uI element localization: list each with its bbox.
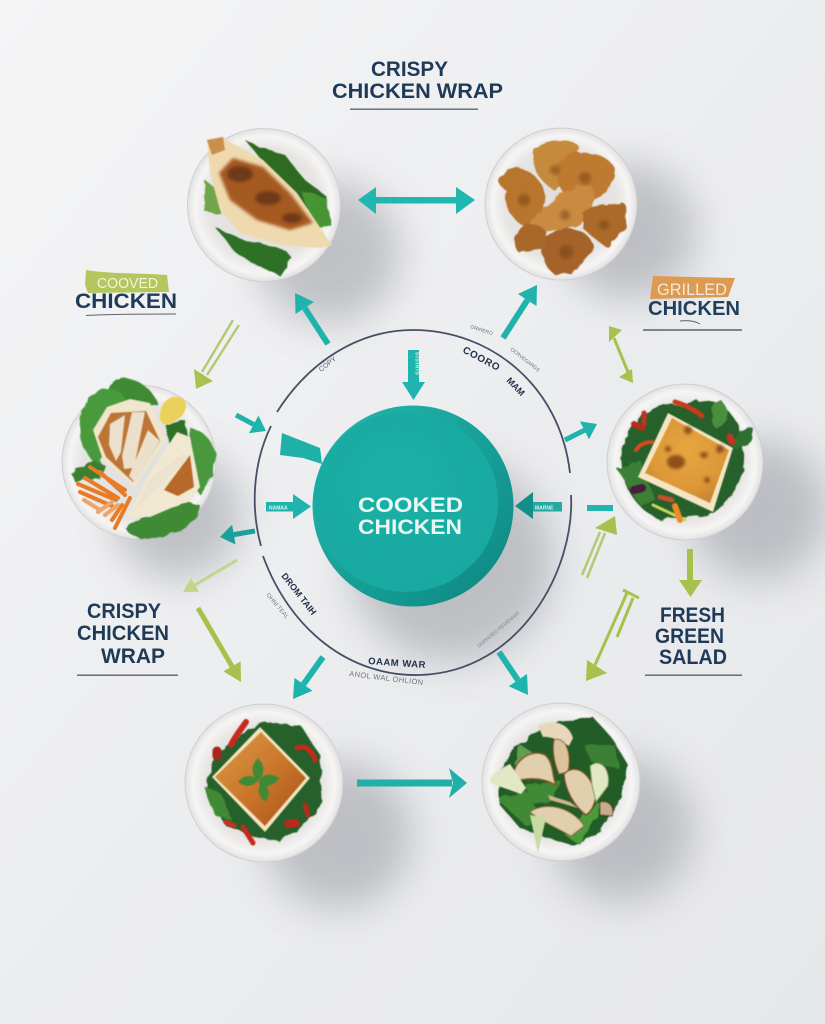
underline	[86, 314, 176, 316]
arrow: lower right	[499, 652, 528, 695]
label: crispy chicken wrap left: CHICKEN	[77, 622, 169, 645]
ring captions: OCRVEGARGS	[509, 347, 541, 374]
chicken piece	[502, 171, 543, 224]
underline	[643, 321, 742, 330]
ring captions: ORIRERO	[469, 324, 494, 337]
arrow: green long lower right	[586, 590, 639, 681]
salad	[618, 399, 757, 520]
arrow: right mid into button: MARNE	[535, 506, 554, 512]
arrow: lower left	[293, 657, 323, 699]
sliced chicken	[490, 722, 613, 853]
wrap half two	[127, 432, 200, 517]
chicken piece	[544, 232, 590, 273]
label: grilled chicken	[643, 276, 742, 330]
title: crispy chicken wrap	[332, 58, 503, 110]
ring captions: ANOL WAL OHLION	[349, 669, 424, 687]
arrow: left mid into button	[266, 494, 311, 519]
badge text: COOVED	[97, 275, 158, 292]
chicken piece	[516, 227, 544, 250]
plate: chicken with peppers	[185, 704, 343, 862]
label text: CHICKEN	[648, 298, 740, 320]
label: crispy chicken wrap left: WRAP	[101, 645, 165, 668]
arrow: upper left	[295, 293, 328, 344]
label: fresh green salad: GREEN	[655, 625, 724, 648]
toasted crust	[219, 158, 313, 230]
teal label tab	[280, 433, 322, 464]
cilantro	[238, 758, 280, 802]
ring captions: COPY	[318, 356, 338, 374]
wrap tip	[207, 137, 225, 155]
title: crispy chicken wrap: CHICKEN WRAP	[332, 80, 503, 103]
ring captions	[264, 324, 541, 687]
badge text: GRILLED	[657, 280, 727, 299]
greens	[205, 140, 331, 276]
arrow: small out of ring right	[565, 421, 597, 440]
central ring	[255, 330, 571, 675]
label text: CHICKEN	[75, 290, 177, 313]
badge: green brush stroke	[85, 270, 169, 293]
lemon	[160, 397, 186, 425]
chicken piece	[585, 205, 624, 245]
vegetables	[634, 402, 732, 520]
ring captions: DROM TAIH	[279, 571, 318, 617]
arrow: pale green left	[183, 560, 237, 592]
label: fresh green salad	[645, 604, 742, 676]
arrow: green double line upper left	[194, 320, 239, 389]
label: fresh green salad: FRESH	[660, 604, 725, 627]
chicken piece	[560, 155, 612, 201]
arrow: centre down	[402, 350, 425, 400]
button base	[312, 406, 514, 606]
plate: crispy chicken wrap	[188, 128, 340, 282]
chicken piece	[533, 188, 592, 228]
badge: orange brush stroke	[650, 276, 735, 299]
plate: wrap with carrots	[62, 378, 216, 539]
ring captions: OVRNOEO REVENHAT	[476, 610, 522, 650]
button title: CHICKEN	[358, 516, 462, 539]
arrow: green double line to plate	[582, 516, 617, 578]
central button: cooked chicken	[312, 406, 514, 606]
plate: grilled chicken salad	[607, 384, 763, 540]
spinach leaves	[72, 378, 216, 538]
arrow: green lower left	[198, 608, 241, 682]
arrow: upper right	[503, 285, 537, 338]
arrow: green down	[679, 549, 702, 597]
arrow: green double headed right	[609, 326, 633, 383]
arrow: left mid into button: NAMAA	[269, 506, 288, 512]
button title: COOKED	[358, 494, 463, 517]
button title	[358, 494, 463, 539]
ring captions: OHNI TEAL	[264, 592, 290, 621]
arrow: bottom teal	[357, 768, 467, 798]
ring captions: COORO	[461, 345, 502, 374]
label: crispy chicken wrap left	[77, 600, 178, 676]
teal dash	[587, 505, 613, 511]
plate: chicken mushroom salad	[482, 703, 640, 861]
wrap half one	[93, 399, 165, 487]
label: fresh green salad: SALAD	[659, 646, 727, 669]
arrow: small into ring left	[236, 415, 266, 433]
wrap	[207, 137, 332, 248]
plate: fried chicken pieces	[485, 128, 637, 280]
peppers	[217, 722, 315, 843]
salad	[203, 722, 322, 842]
label: cooved chicken	[75, 270, 177, 316]
carrots	[78, 467, 130, 528]
label: crispy chicken wrap left: CRISPY	[87, 600, 161, 623]
arrow: left lower out of ring	[220, 525, 255, 544]
arrow: top double teal	[358, 187, 475, 214]
chicken slab	[638, 413, 733, 512]
ring captions: MAM	[505, 375, 527, 398]
arrow: centre down: STSTRTS	[414, 352, 420, 375]
chicken slab	[212, 727, 310, 832]
arrow: right mid into button	[515, 492, 562, 519]
chicken piece	[536, 143, 577, 188]
ring captions: OAAM WAR	[368, 656, 426, 671]
button face	[314, 412, 498, 592]
salad	[498, 716, 628, 846]
title: crispy chicken wrap: CRISPY	[371, 58, 448, 81]
